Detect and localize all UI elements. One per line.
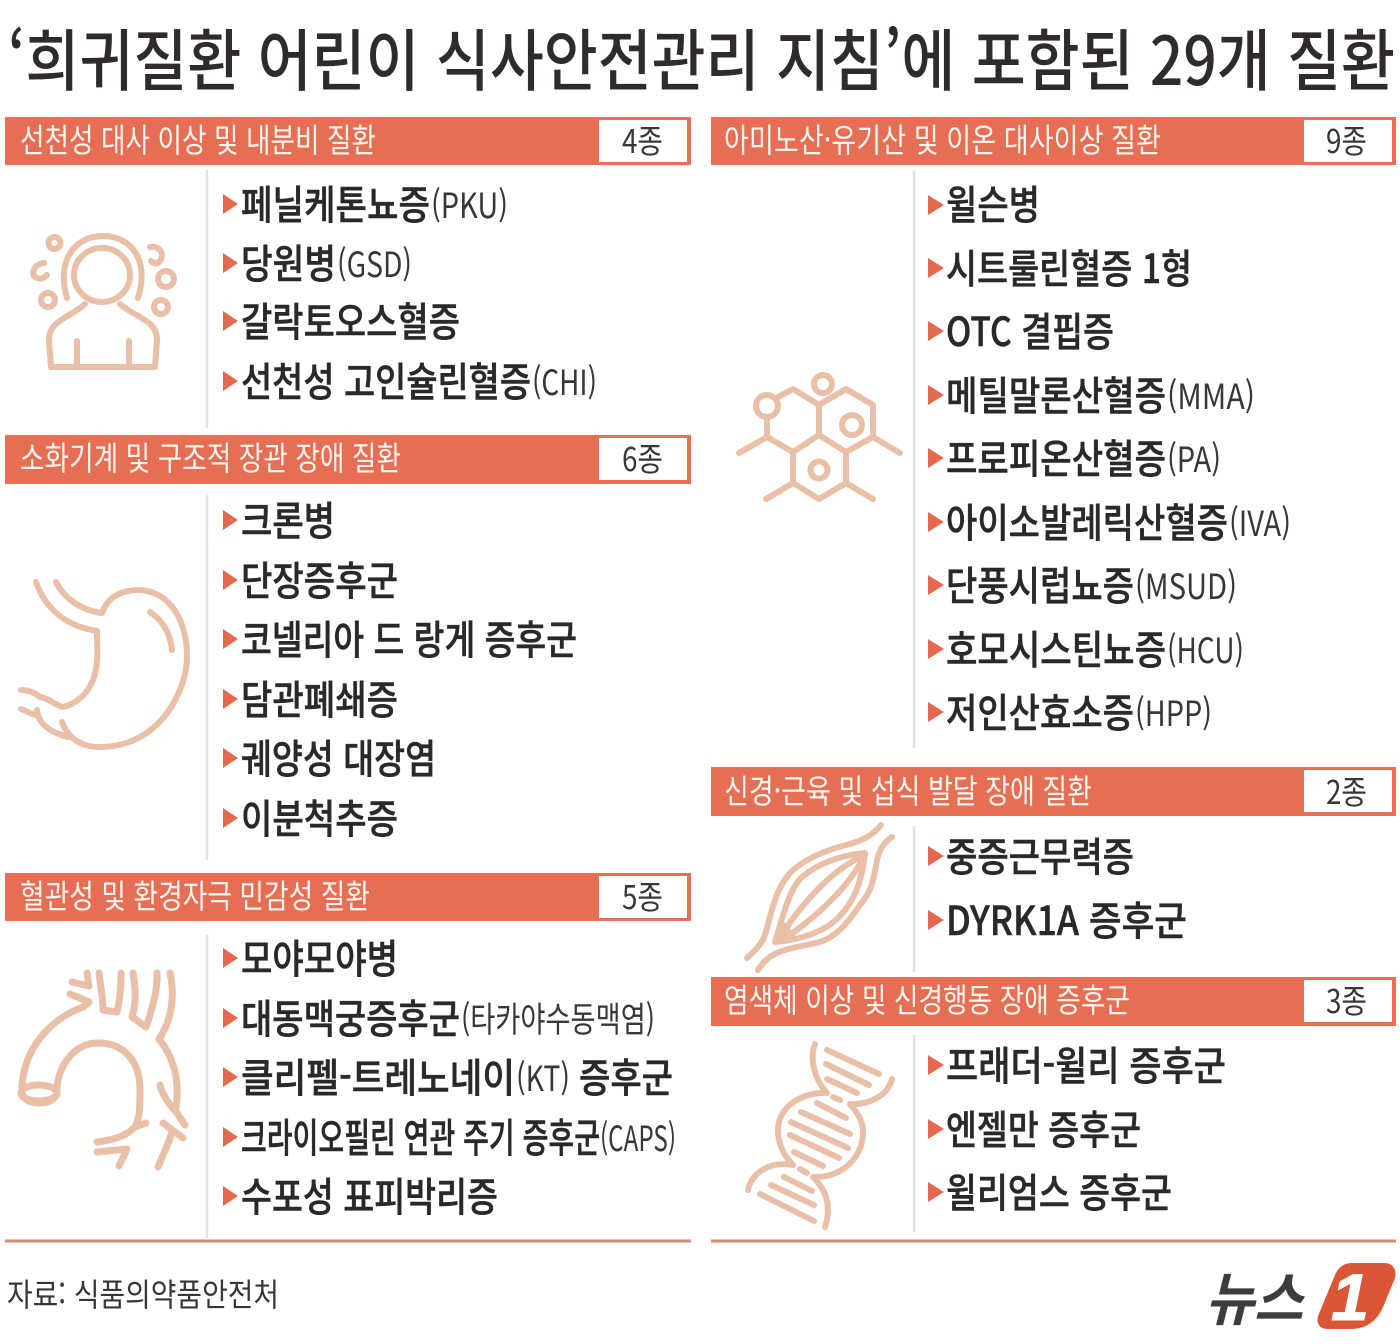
list item: (MSUD)	[1135, 559, 1237, 610]
panel: amino acid, organic acid and ion metabolism diseases	[711, 114, 1396, 748]
list item: 메틸말론산혈증	[946, 364, 1166, 422]
logo: News1: 1	[1331, 1260, 1369, 1334]
list item	[223, 232, 412, 290]
panel header	[5, 114, 691, 165]
list item: 코넬리아 드 랑게 증후군	[241, 608, 577, 666]
panel header: 9종	[1326, 115, 1367, 163]
list item: 궤양성 대장염	[241, 727, 436, 785]
panel header: 혈관성 및 환경자극 민감성 질환	[20, 870, 370, 918]
list item: 이분척추증	[241, 787, 398, 845]
list item: 프로피온산혈증	[946, 427, 1166, 485]
panel header	[5, 432, 691, 484]
list item: 단장증후군	[241, 549, 398, 607]
list item: (HCU)	[1167, 623, 1244, 674]
list item: 저인산효소증	[946, 681, 1134, 739]
list item: 크라이오필린 연관 주기 증후군	[241, 1106, 600, 1164]
panel header: 염색체 이상 및 신경행동 장애 증후군	[724, 974, 1130, 1022]
panel header	[5, 870, 691, 921]
list item: (HPP)	[1135, 686, 1212, 737]
panel: congenital metabolic and endocrine diseases	[5, 114, 691, 428]
list item: 증후군	[579, 1046, 673, 1104]
list item	[223, 987, 655, 1045]
panel header: 아미노산·유기산 및 이온 대사이상 질환	[724, 114, 1161, 162]
list item: (PKU)	[431, 178, 508, 229]
list item: (KT)	[516, 1051, 570, 1102]
list item: (타카야수동맥염)	[461, 992, 655, 1043]
list item: DYRK1A 증후군	[946, 889, 1187, 947]
list item: 갈락토오스혈증	[241, 290, 460, 348]
list item: 대동맥궁증후군	[241, 987, 460, 1045]
list item: 담관폐쇄증	[241, 668, 398, 726]
icon: DNA helix	[748, 1044, 892, 1227]
icon: stomach	[21, 582, 187, 747]
panel header	[711, 765, 1396, 816]
list item: 프래더-윌리 증후군	[946, 1034, 1226, 1092]
list item: 페닐케톤뇨증	[241, 173, 430, 231]
list item: 크론병	[241, 489, 335, 547]
icon: muscle	[747, 825, 892, 970]
panel header: 3종	[1326, 975, 1367, 1023]
panel header: 5종	[622, 871, 663, 919]
panel header: 6종	[622, 433, 663, 481]
list item: (MMA)	[1167, 369, 1255, 420]
logo: News1	[1201, 1253, 1396, 1337]
panel header: 2종	[1326, 766, 1367, 814]
panel: chromosomal and neurobehavioral syndromes	[711, 974, 1396, 1232]
icon: molecule	[739, 375, 900, 499]
list item: 호모시스틴뇨증	[946, 618, 1166, 676]
list item: 선천성 고인슐린혈증	[241, 350, 531, 408]
panel header: 선천성 대사 이상 및 내분비 질환	[20, 114, 376, 162]
list item: (CHI)	[532, 355, 597, 406]
list item: 윌리엄스 증후군	[946, 1161, 1172, 1219]
panel header	[711, 974, 1396, 1026]
list item: 당원병	[241, 232, 336, 290]
list item: (CAPS)	[600, 1111, 676, 1162]
icon: person with symptoms	[33, 236, 174, 367]
list item: 시트룰린혈증 1형	[946, 237, 1192, 295]
list item: OTC 결핍증	[946, 300, 1114, 358]
panel: digestive and structural bowel diseases	[5, 432, 691, 860]
source note: 자료: 식품의약품안전처	[7, 1270, 279, 1316]
list item: (GSD)	[337, 237, 412, 288]
panel header: 신경·근육 및 섭식 발달 장애 질환	[724, 765, 1092, 813]
list item: 단풍시럽뇨증	[946, 554, 1134, 612]
panel: neuromuscular and feeding development diseases	[711, 765, 1396, 972]
logo: News1: 뉴스	[1201, 1253, 1320, 1337]
panel header: 4종	[622, 115, 663, 163]
list item: 클리펠-트레노네이	[241, 1046, 515, 1104]
list item: 엔젤만 증후군	[946, 1098, 1141, 1156]
list item: 윌슨병	[946, 173, 1040, 231]
list item	[223, 1046, 673, 1104]
list item: (PA)	[1167, 432, 1221, 483]
panel: vascular and environmental sensitivity diseases	[5, 870, 691, 1238]
panel header: 소화기계 및 구조적 장관 장애 질환	[20, 432, 401, 480]
icon: aorta	[21, 973, 185, 1167]
list item: 아이소발레릭산혈증	[946, 491, 1228, 549]
list item: 수포성 표피박리증	[241, 1165, 498, 1223]
list item: 모야모야병	[241, 927, 398, 985]
list item: 중증근무력증	[946, 825, 1134, 883]
list item: (IVA)	[1229, 496, 1291, 547]
